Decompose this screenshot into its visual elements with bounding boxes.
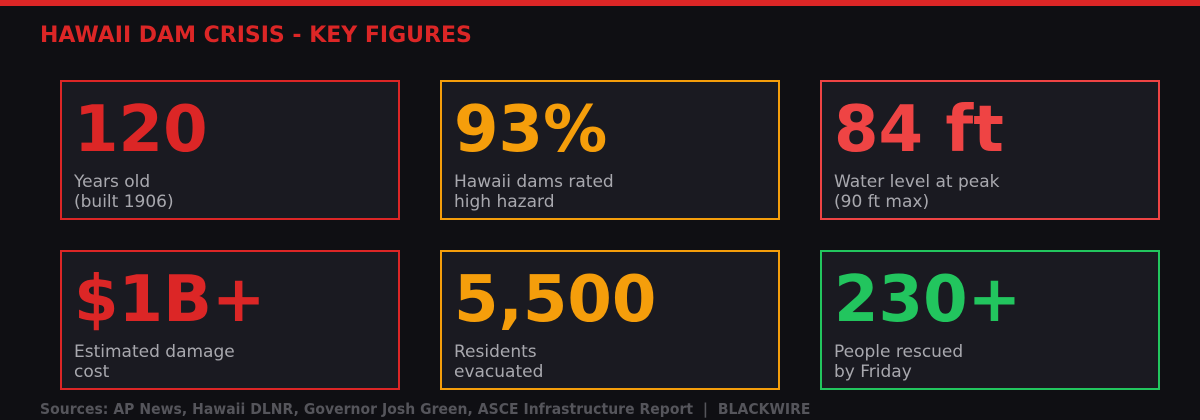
card: 93%: Hawaii dams rated	[454, 172, 614, 192]
card: 84 ft: Water level at peak	[834, 172, 999, 192]
card: 230+: by Friday	[834, 362, 912, 382]
card: 230+	[820, 250, 1160, 390]
card: 84 ft	[820, 80, 1160, 220]
card: 230+: People rescued	[834, 342, 963, 362]
card: $1B+: cost	[74, 362, 109, 382]
card: 120 years: (built 1906)	[74, 192, 174, 212]
card: 93%: 93%	[454, 93, 607, 167]
card: 93%	[440, 80, 780, 220]
card: 93%: high hazard	[454, 192, 554, 212]
card: 84 ft: (90 ft max)	[834, 192, 929, 212]
card: 230+: 230+	[834, 263, 1021, 337]
card: 120 years: 120	[74, 93, 208, 167]
card: 5,500: Residents	[454, 342, 537, 362]
card: 120 years	[60, 80, 400, 220]
card: $1B+: $1B+	[74, 263, 265, 337]
card: $1B+	[60, 250, 400, 390]
card: $1B+: Estimated damage	[74, 342, 235, 362]
title: HAWAII DAM CRISIS - KEY FIGURES	[40, 23, 472, 48]
card: 5,500: 5,500	[454, 263, 656, 337]
card: 120 years: Years old	[74, 172, 150, 192]
card: 5,500	[440, 250, 780, 390]
card: 84 ft: 84 ft	[834, 93, 1004, 167]
footer sources: Sources: AP News, Hawaii DLNR, Governor Josh Green, ASCE Infrastructure Report | BLACKWIRE	[40, 400, 811, 418]
card: 5,500: evacuated	[454, 362, 543, 382]
top accent bar	[0, 0, 1200, 6]
